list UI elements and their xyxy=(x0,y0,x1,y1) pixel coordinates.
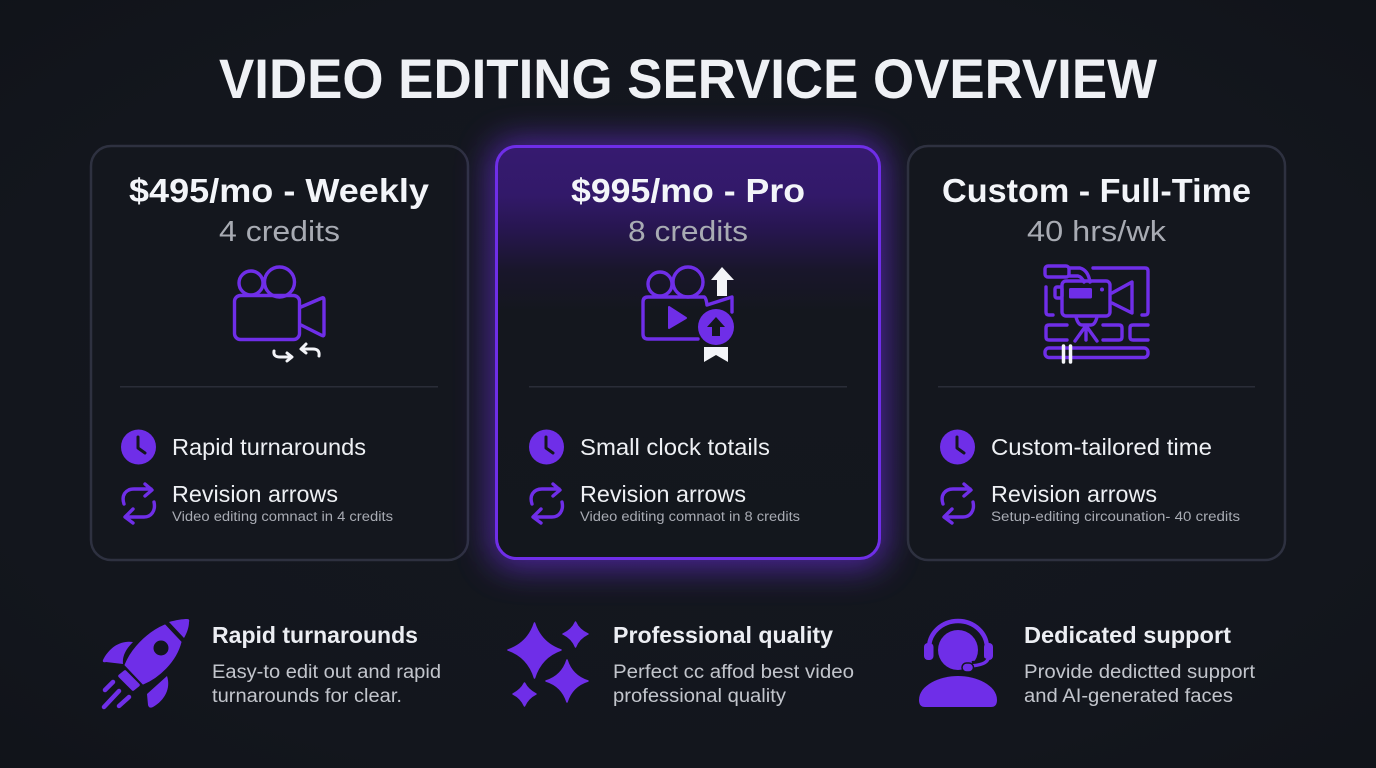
pro plan heading: $995/mo - Pro xyxy=(571,172,805,209)
feature: revision arrows: Video editing comnaot in 8 credits xyxy=(580,509,800,524)
feature: custom-tailored time xyxy=(940,430,1212,464)
title: VIDEO EDITING SERVICE OVERVIEW xyxy=(219,47,1157,110)
pro plan credits: 8 credits xyxy=(628,216,748,248)
benefit: rapid turnarounds: turnarounds for clear. xyxy=(212,686,402,707)
full-time plan hours: 40 hrs/wk xyxy=(1027,216,1167,248)
panel: full-time plan xyxy=(908,146,1285,560)
benefit: rapid turnarounds: Rapid turnarounds xyxy=(212,622,418,648)
benefit: rapid turnarounds xyxy=(103,619,441,708)
icon: support agent headset xyxy=(919,621,997,707)
icon: camera on tripod with timeline xyxy=(1045,266,1148,362)
icon: rocket xyxy=(103,619,189,708)
panel: weekly plan xyxy=(91,146,468,560)
benefit: professional quality: Professional quality xyxy=(613,622,833,648)
feature: revision arrows: Revision arrows xyxy=(172,481,338,507)
feature: rapid turnarounds: Rapid turnarounds xyxy=(172,434,366,460)
icon: video camera with upgrade badge xyxy=(643,267,734,362)
feature: revision arrows xyxy=(123,481,393,524)
feature: revision arrows: Video editing comnact in 4 credits xyxy=(172,509,393,524)
feature: revision arrows: Revision arrows xyxy=(991,481,1157,507)
feature: revision arrows: Revision arrows xyxy=(580,481,746,507)
feature: revision arrows: Setup-editing circounation- 40 credits xyxy=(991,509,1240,524)
benefit: dedicated support: Dedicated support xyxy=(1024,622,1231,648)
benefit: professional quality: Perfect cc affod best video xyxy=(613,662,854,683)
feature: revision arrows xyxy=(942,481,1240,524)
benefit: dedicated support: Provide dedictted support xyxy=(1024,662,1256,683)
benefit: rapid turnarounds: Easy-to edit out and rapid xyxy=(212,662,441,683)
icon: video camera with revision arrows xyxy=(234,267,324,361)
icon: sparkles xyxy=(508,622,588,706)
weekly plan credits: 4 credits xyxy=(219,216,340,248)
weekly plan heading: $495/mo - Weekly xyxy=(129,172,430,209)
benefit: professional quality: professional quality xyxy=(613,686,787,707)
feature: small clock totails xyxy=(529,430,770,464)
benefit: dedicated support xyxy=(919,621,1256,707)
feature: small clock totails: Small clock totails xyxy=(580,434,770,460)
full-time plan heading: Custom - Full-Time xyxy=(942,172,1251,209)
panel: pro plan (highlighted) xyxy=(490,140,886,568)
feature: revision arrows xyxy=(531,481,800,524)
feature: rapid turnarounds xyxy=(121,430,366,464)
benefit: professional quality xyxy=(508,622,854,707)
benefit: dedicated support: and AI-generated faces xyxy=(1024,686,1233,707)
feature: custom-tailored time: Custom-tailored time xyxy=(991,434,1212,460)
